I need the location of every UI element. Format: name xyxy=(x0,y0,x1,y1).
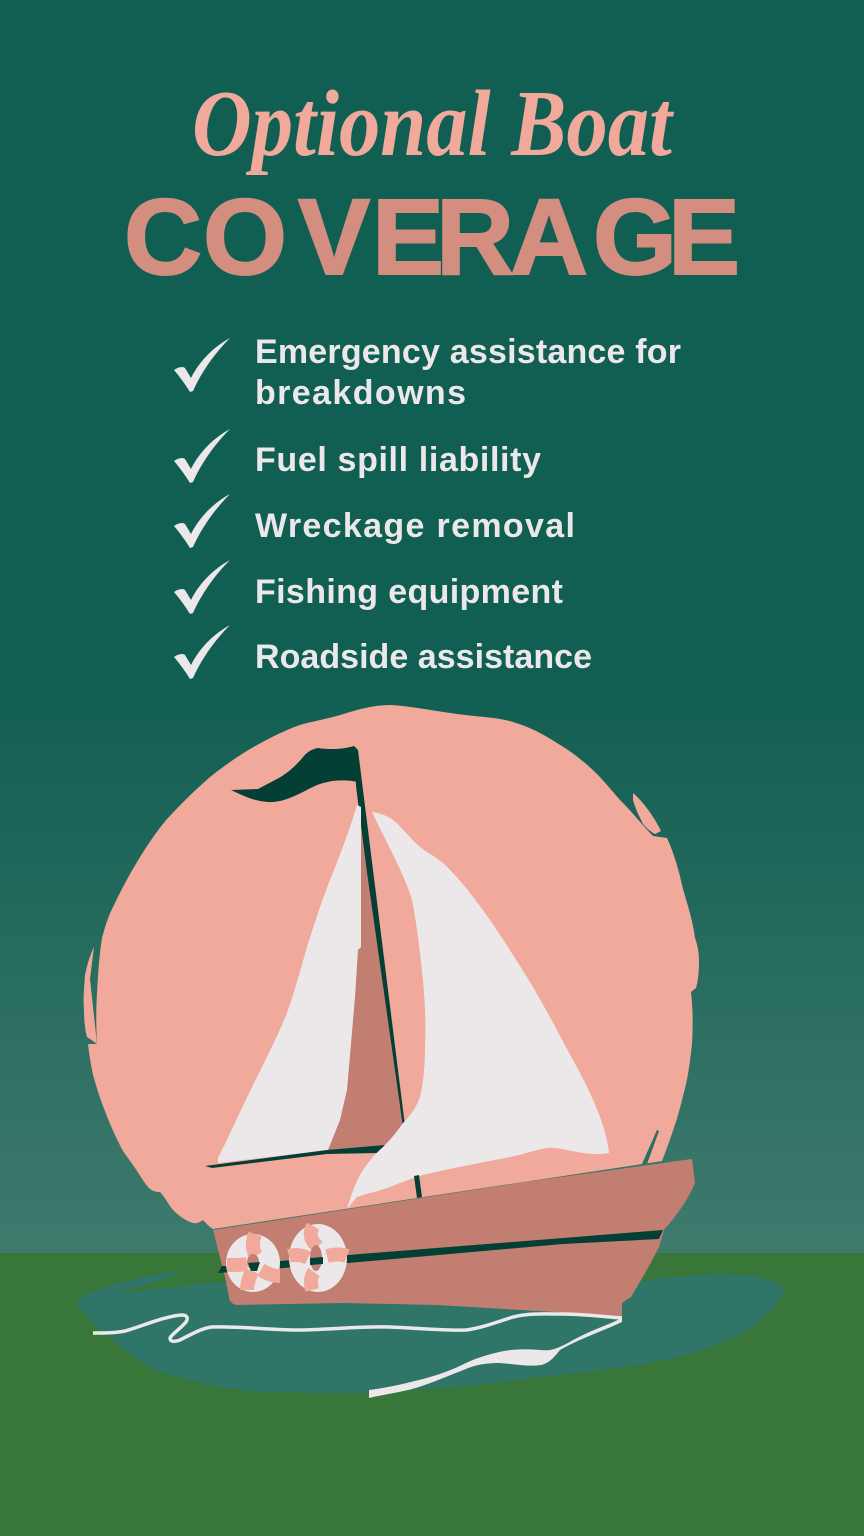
icon: check mark xyxy=(174,560,230,614)
text: fishing equipment: Fishing equipment xyxy=(255,573,563,611)
life ring right xyxy=(289,1224,347,1292)
shadow sail xyxy=(328,830,403,1150)
item: wreckage removal xyxy=(174,494,575,548)
short post xyxy=(414,1175,422,1198)
text: breakdowns: breakdowns xyxy=(255,374,466,412)
large sail xyxy=(347,812,609,1209)
boom xyxy=(205,1145,385,1168)
sun sliver right xyxy=(633,793,661,834)
illustration: sailboat xyxy=(77,705,784,1398)
small sail xyxy=(218,805,361,1163)
sun disc xyxy=(88,705,699,1229)
mast xyxy=(354,746,405,1128)
title xyxy=(124,72,740,297)
hull stripe segment between rings xyxy=(280,1260,292,1268)
item: roadside assistance xyxy=(174,625,592,679)
text: emergency assistance for: Emergency assistance for xyxy=(255,333,681,371)
water puddle xyxy=(77,1271,784,1393)
text: fuel spill liability: Fuel spill liability xyxy=(255,441,541,479)
flag xyxy=(231,746,358,802)
wave ribbon thick xyxy=(369,1318,622,1398)
icon: check mark xyxy=(174,429,230,483)
hull xyxy=(213,1159,695,1317)
right stay xyxy=(642,1130,659,1164)
item: fuel spill liability xyxy=(174,429,541,483)
hull stripe xyxy=(218,1230,663,1273)
background: green ground xyxy=(0,1253,864,1536)
icon: check mark xyxy=(174,625,230,679)
life ring left xyxy=(218,1234,280,1292)
heading: COVERAGE: COVERAGE xyxy=(124,176,740,297)
icon: check mark xyxy=(174,494,230,548)
item: emergency assistance xyxy=(174,333,681,412)
item: fishing equipment xyxy=(174,560,563,614)
text: wreckage removal: Wreckage removal xyxy=(255,507,575,545)
heading: Optional Boat: Optional Boat xyxy=(192,72,675,176)
wave line thin xyxy=(93,1314,622,1341)
icon: check mark xyxy=(174,338,230,392)
stripe stub left xyxy=(218,1266,230,1273)
text: roadside assistance: Roadside assistance xyxy=(255,638,592,676)
checklist xyxy=(174,333,681,679)
sun sliver left xyxy=(84,947,97,1044)
